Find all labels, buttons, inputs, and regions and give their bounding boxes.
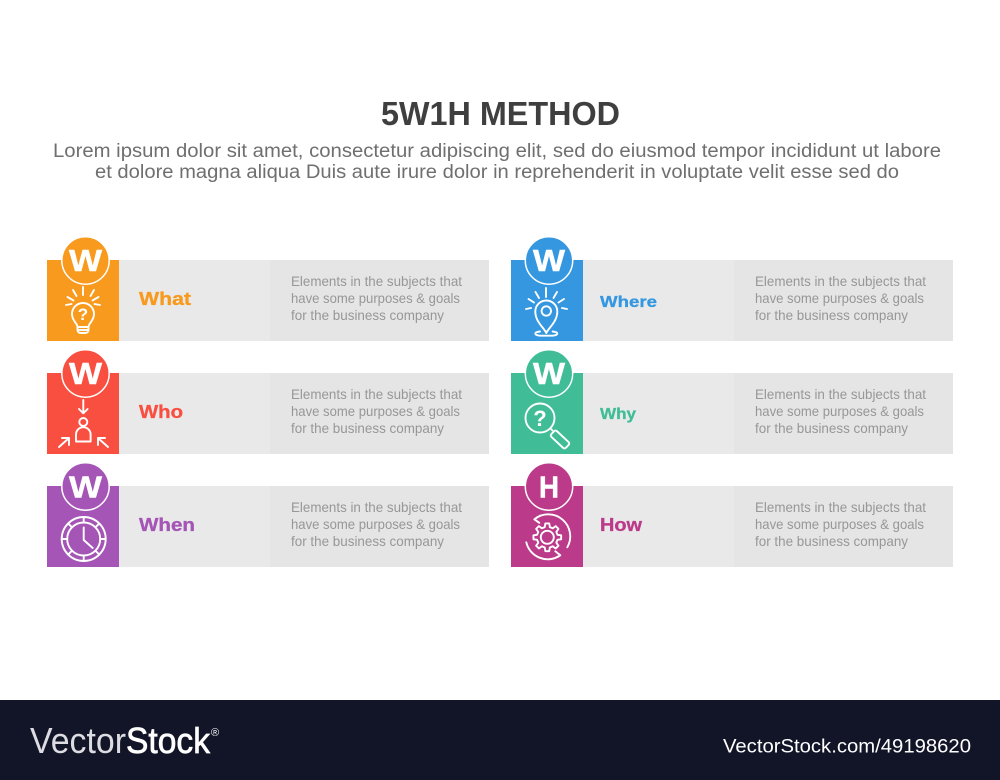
panel: who [47,350,489,454]
label: how: How [600,515,643,535]
icon: magnifying glass with question mark [526,404,570,449]
badge: who letter [62,350,109,397]
badge: how letter: H [539,470,559,504]
description: how [755,499,926,549]
subtitle text block: Lorem ipsum dolor sit amet, consectetur adipiscing elit, sed do eiusmod tempor incididunt ut labore [53,141,941,162]
title: 5W1H METHOD [381,95,620,132]
description: why: for the business company [755,420,908,436]
description: where: for the business company [755,307,908,323]
subtitle text block: et dolore magna aliqua Duis aute irure dolor in reprehenderit in voluptate velit esse sed do [95,162,899,183]
footer logo: ® [211,727,219,739]
description: why: Elements in the subjects that [755,386,926,402]
label: who: Who [139,402,183,422]
description: how: for the business company [755,533,908,549]
description: who: for the business company [291,420,444,436]
badge: where letter: W [533,243,566,278]
footer image id: VectorStock.com/49198620 [723,736,971,758]
description: when [291,499,462,549]
label: when: When [139,515,195,535]
icon: clock [62,517,106,561]
description: where: Elements in the subjects that [755,273,926,289]
badge: why letter: W [533,356,566,391]
icon: light bulb with question mark [66,287,100,333]
badge: when letter: W [69,470,103,504]
description: what: have some purposes & goals [291,290,460,306]
description: what: Elements in the subjects that [291,273,462,289]
description: where: have some purposes & goals [755,290,924,306]
icon: person with arrows [59,400,108,447]
description: how: have some purposes & goals [755,516,924,532]
icon: light bulb with question mark: ? [78,305,88,324]
footer logo: Stock [126,720,211,761]
description: when: have some purposes & goals [291,516,460,532]
description: when: for the business company [291,533,444,549]
description: where [755,273,926,323]
label: why: Why [600,406,636,423]
panel: why [511,350,953,454]
badge: what letter: W [69,243,103,278]
label: what: What [139,289,191,309]
description: how: Elements in the subjects that [755,499,926,515]
badge: why letter [525,350,573,397]
subtitle text block [53,141,941,183]
footer logo [30,720,219,761]
badge: what letter [62,237,109,284]
icon: location pin [526,288,567,336]
description: what: for the business company [291,307,444,323]
description: who [291,386,462,436]
description: who: Elements in the subjects that [291,386,462,402]
description: who: have some purposes & goals [291,403,460,419]
badge: who letter: W [69,356,103,391]
description: why [755,386,926,436]
panel: what [47,237,489,341]
panel: how [511,463,953,567]
description: when: Elements in the subjects that [291,499,462,515]
footer banner [0,700,1000,780]
panel: where [511,237,953,341]
icon: magnifying glass with question mark: ? [533,406,547,431]
footer logo: Vector [30,720,126,761]
label: where: Where [600,294,657,311]
icon: gear with cycle arrows [526,514,570,559]
description: why: have some purposes & goals [755,403,924,419]
badge: how letter [525,463,573,510]
description: what [291,273,462,323]
panel: when [47,463,489,567]
badge: when letter [62,463,109,510]
badge: where letter [525,237,573,284]
